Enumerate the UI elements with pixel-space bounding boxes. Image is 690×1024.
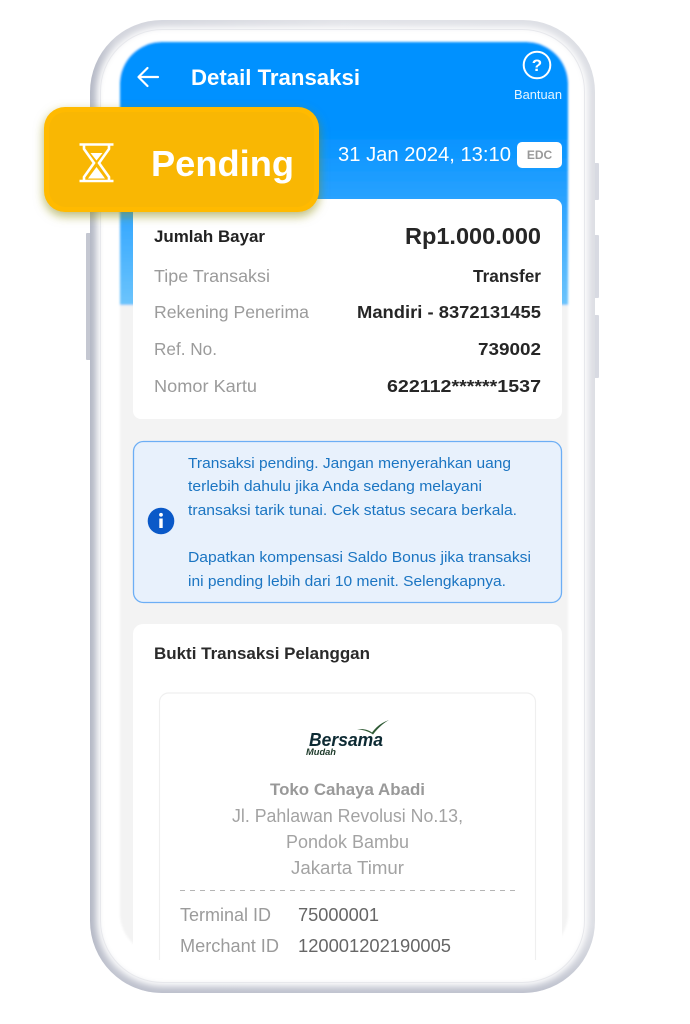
- logo: Bersama: Bersama: [309, 730, 383, 750]
- status badge: pending: [44, 107, 319, 212]
- info text: [188, 455, 531, 590]
- blue header background: [120, 42, 568, 305]
- icon: back arrow: [138, 68, 158, 86]
- terminal id: [180, 905, 379, 925]
- row: recipient account: Mandiri - 8372131455: [357, 302, 541, 322]
- infographic: phone with pending transaction: [36, 20, 599, 993]
- merchant id: Merchant ID: [180, 936, 279, 956]
- EDC tag: EDC: [527, 148, 552, 162]
- row: card number: 622112******1537: [387, 376, 541, 396]
- row: amount: [154, 223, 541, 249]
- merchant address: Jl. Pahlawan Revolusi No.13,: [232, 806, 463, 826]
- row: transaction type: Tipe Transaksi: [154, 266, 270, 286]
- row: reference number: Ref. No.: [154, 339, 217, 359]
- info text: Dapatkan kompensasi Saldo Bonus jika transaksi: [188, 549, 531, 566]
- row: reference number: [154, 339, 541, 359]
- help button: [514, 52, 562, 102]
- icon: hourglass: [80, 144, 114, 181]
- logo: Bersama: Mudah: [306, 747, 336, 758]
- callout: pending information: [134, 442, 562, 602]
- EDC tag: [517, 142, 562, 168]
- info text: Transaksi pending. Jangan menyerahkan uang: [188, 455, 511, 472]
- merchant address: [232, 806, 463, 878]
- row: card number: Nomor Kartu: [154, 376, 257, 396]
- merchant id: 120001202190005: [298, 936, 451, 956]
- terminal id: Terminal ID: [180, 905, 271, 925]
- row: amount: Rp1.000.000: [405, 223, 541, 249]
- panel: customer transaction proof: [133, 624, 562, 962]
- receipt: [160, 693, 536, 960]
- title text: Detail Transaksi: [191, 65, 360, 90]
- merchant name: Toko Cahaya Abadi: [270, 780, 425, 799]
- icon: info: [148, 508, 174, 534]
- header title: [138, 65, 360, 90]
- panel: transaction details: [133, 199, 562, 419]
- row: transaction type: [154, 266, 541, 286]
- proof heading: Bukti Transaksi Pelanggan: [154, 644, 370, 663]
- merchant id: [180, 936, 451, 956]
- info text: transaksi tarik tunai. Cek status secara berkala.: [188, 502, 517, 519]
- row: card number: [154, 376, 541, 396]
- icon: question mark: ?: [532, 56, 542, 75]
- info text: ini pending lebih dari 10 menit. Selengkapnya.: [188, 573, 506, 590]
- merchant address: Jakarta Timur: [291, 858, 404, 878]
- terminal id: 75000001: [298, 905, 379, 925]
- row: amount: Jumlah Bayar: [154, 228, 266, 246]
- info text: terlebih dahulu jika Anda sedang melayani: [188, 478, 482, 495]
- phone side buttons: [86, 163, 599, 378]
- row: recipient account: Rekening Penerima: [154, 302, 309, 322]
- row: reference number: 739002: [478, 339, 541, 359]
- help label: Bantuan: [514, 88, 562, 102]
- logo: Bersama: [306, 720, 389, 758]
- row: recipient account: [154, 302, 541, 322]
- row: transaction type: Transfer: [473, 266, 541, 286]
- screen: [120, 42, 568, 955]
- merchant address: Pondok Bambu: [286, 832, 409, 852]
- date and time: 31 Jan 2024, 13:10: [338, 144, 511, 166]
- phone body: [90, 20, 595, 993]
- badge label: Pending: [151, 143, 294, 184]
